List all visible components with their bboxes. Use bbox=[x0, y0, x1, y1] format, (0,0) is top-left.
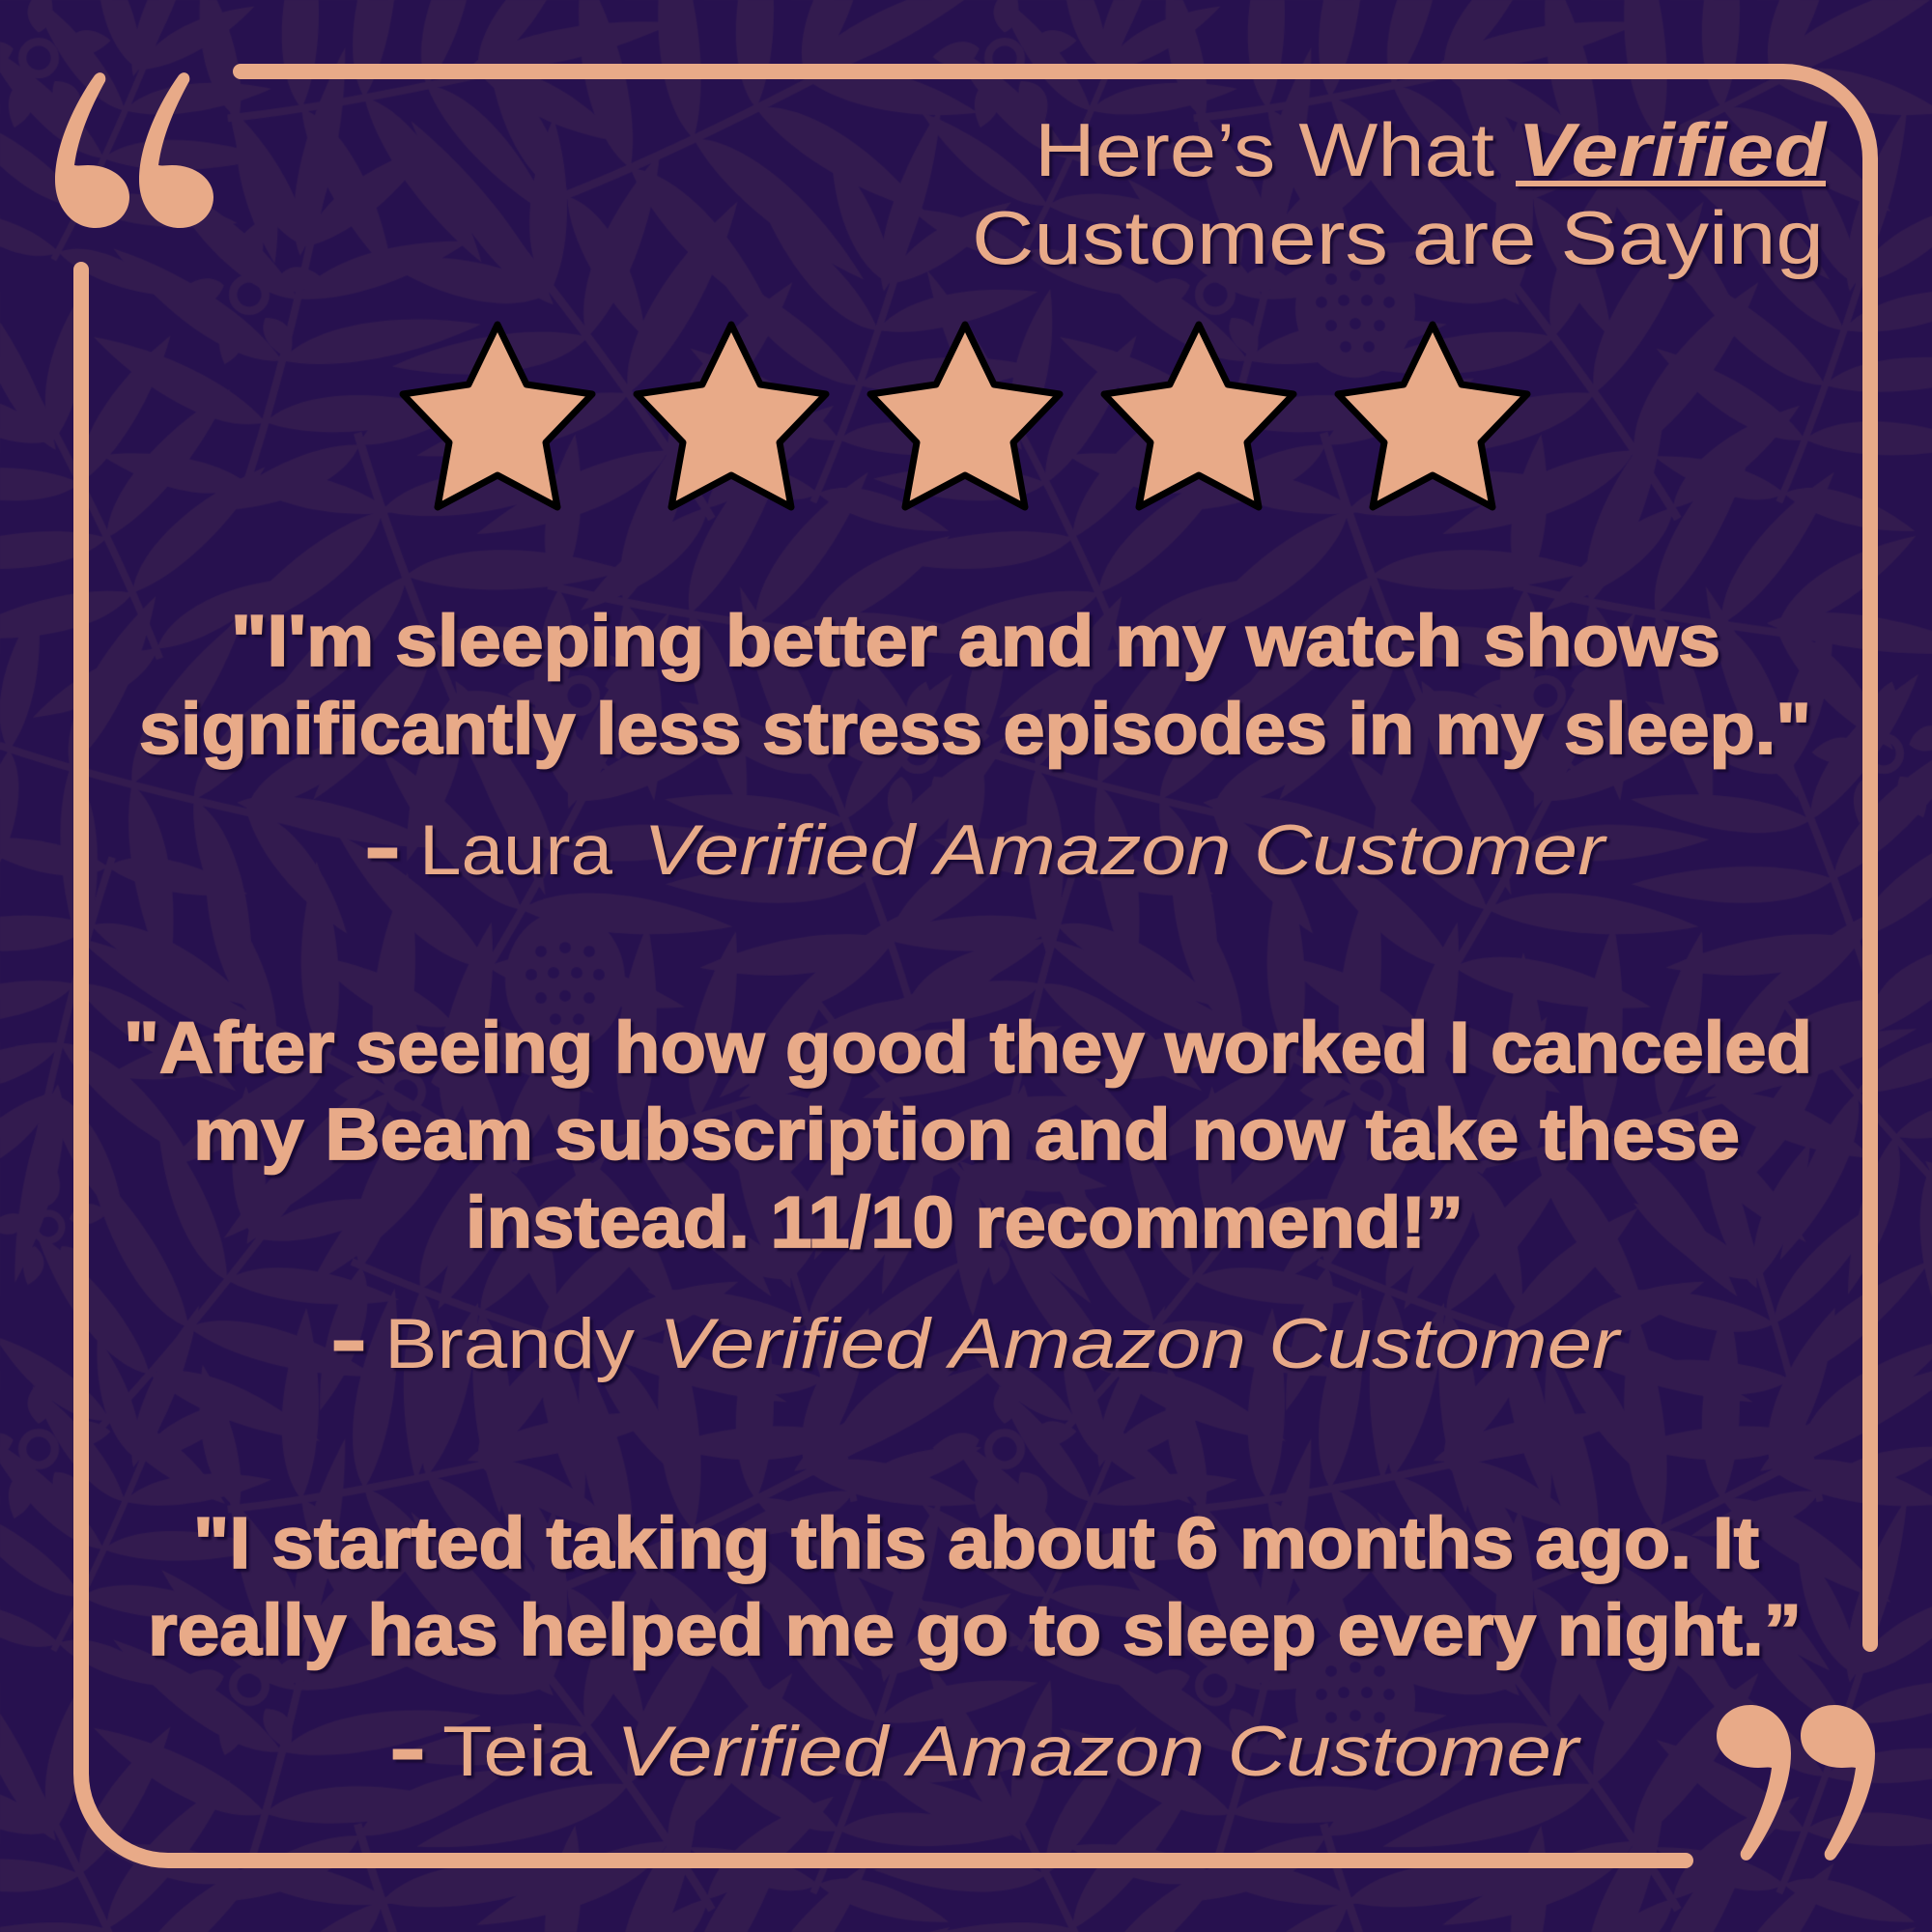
quote text: "I started taking this about 6 months ago. It bbox=[193, 1502, 1759, 1583]
frame: left and bottom border bbox=[81, 270, 1686, 1861]
attribution bbox=[388, 1698, 1581, 1797]
attribution: Brandy bbox=[384, 1305, 636, 1383]
star 3 bbox=[870, 325, 1060, 507]
heading bbox=[972, 107, 1828, 280]
quote text bbox=[124, 1007, 1812, 1263]
quote text: "After seeing how good they worked I canceled bbox=[124, 1007, 1812, 1088]
quote text: "I'm sleeping better and my watch shows bbox=[231, 600, 1720, 681]
testimonial: Teia bbox=[148, 1502, 1802, 1797]
attribution: - bbox=[329, 1290, 368, 1388]
quote text: significantly less stress episodes in my sleep." bbox=[139, 688, 1811, 769]
attribution bbox=[363, 797, 1607, 895]
frame: top and right border bbox=[241, 71, 1870, 1644]
quote text: really has helped me go to sleep every night.” bbox=[148, 1589, 1802, 1670]
heading: Customers are Saying bbox=[972, 195, 1824, 280]
quote text bbox=[148, 1502, 1802, 1670]
star 2 bbox=[637, 325, 826, 507]
attribution: Laura bbox=[419, 811, 612, 890]
testimonial: Laura bbox=[139, 600, 1811, 895]
attribution bbox=[329, 1290, 1622, 1388]
icon: opening quotation mark bbox=[55, 72, 213, 228]
quote text: my Beam subscription and now take these bbox=[193, 1094, 1740, 1175]
attribution: - bbox=[388, 1698, 427, 1797]
star 4 bbox=[1104, 325, 1293, 507]
five star rating bbox=[403, 325, 1527, 507]
attribution: Verified Amazon Customer bbox=[643, 811, 1607, 890]
star 5 bbox=[1338, 325, 1527, 507]
attribution: Teia bbox=[442, 1713, 592, 1791]
quote text bbox=[139, 600, 1811, 769]
attribution: Verified Amazon Customer bbox=[616, 1713, 1581, 1791]
attribution: - bbox=[363, 797, 402, 895]
attribution: Verified Amazon Customer bbox=[659, 1305, 1622, 1383]
heading: Verified bbox=[1518, 107, 1828, 192]
heading: Here’s What bbox=[1035, 107, 1494, 192]
testimonial: Brandy bbox=[124, 1007, 1812, 1388]
icon: closing quotation mark bbox=[1717, 1705, 1875, 1861]
quote text: instead. 11/10 recommend!” bbox=[466, 1181, 1463, 1263]
star 1 bbox=[403, 325, 592, 507]
